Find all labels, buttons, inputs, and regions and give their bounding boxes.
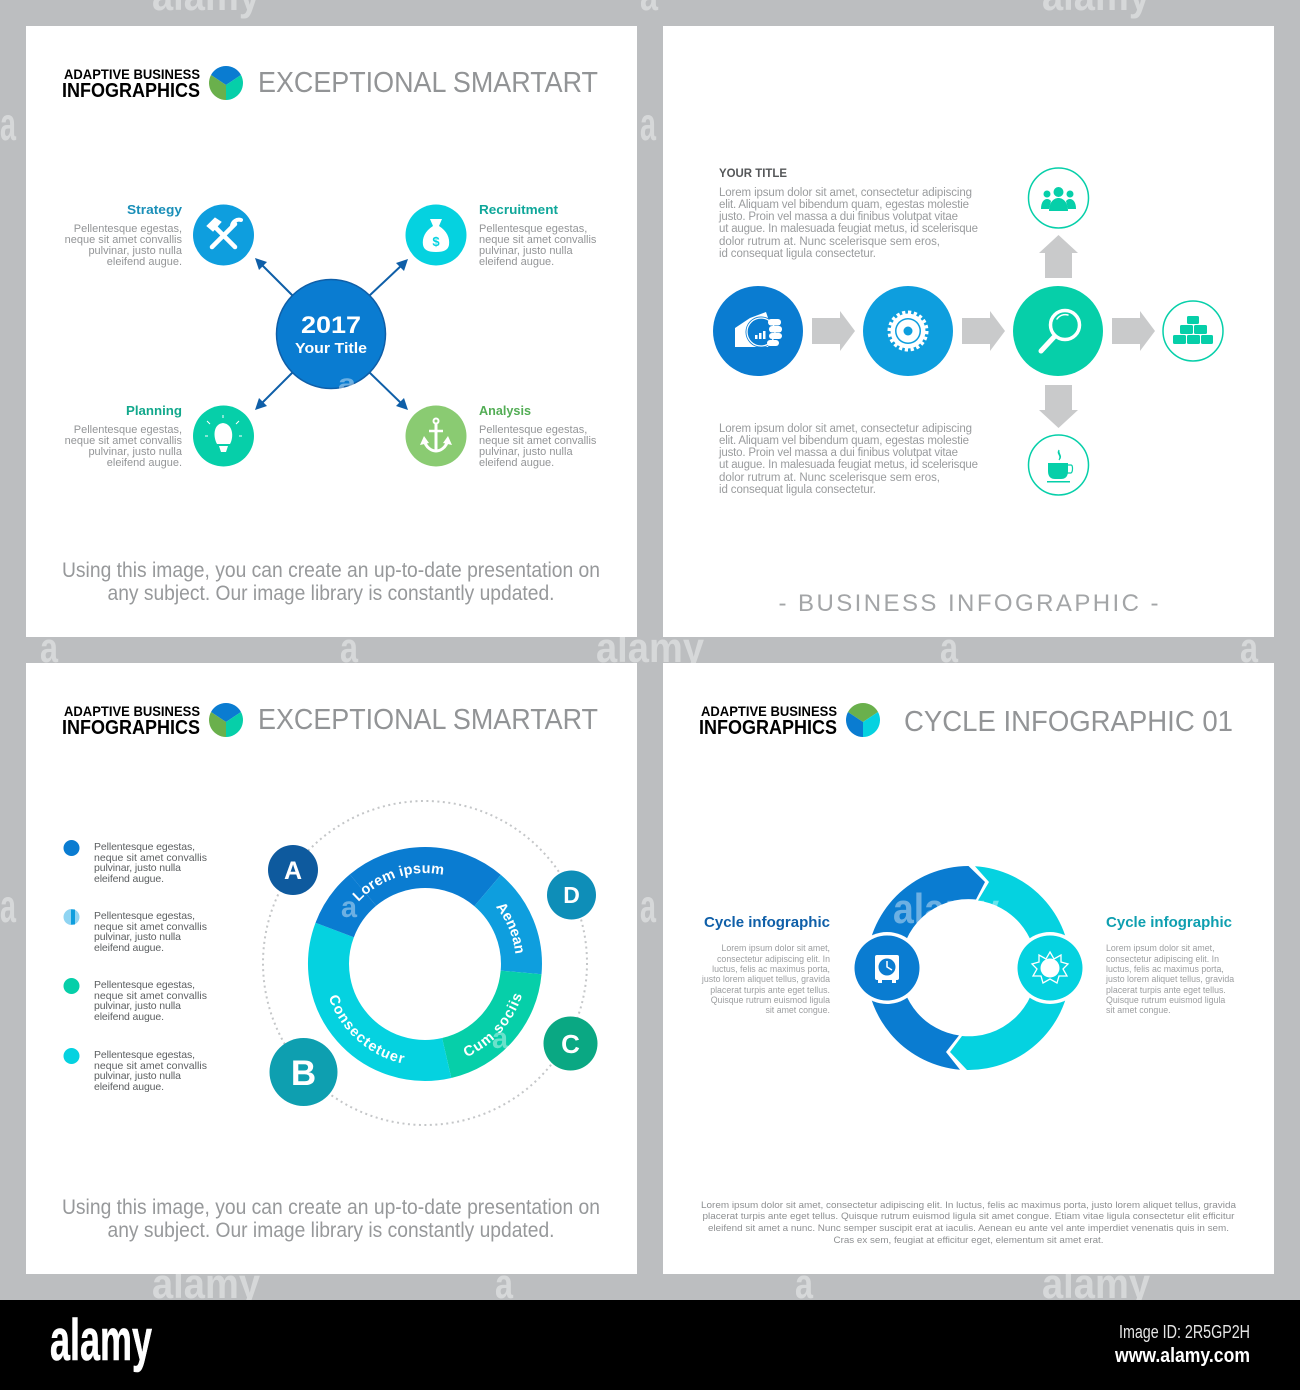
node: recruitment [406, 202, 597, 268]
right text: Lorem ipsum dolor sit amet, [1106, 943, 1215, 953]
legend: eleifend augue. [94, 942, 164, 954]
left text: consectetur adipiscing elit. In [717, 954, 830, 964]
centre circle: Your Title [295, 340, 367, 357]
node: strategy: pulvinar, justo nulla [88, 245, 183, 257]
icon: tools [207, 218, 241, 247]
legend: eleifend augue. [94, 1011, 164, 1023]
node: strategy: Pellentesque egestas, [74, 223, 182, 235]
badge: C [544, 1016, 598, 1070]
icon: magnifier [1041, 310, 1080, 351]
icon: money bag [423, 219, 449, 252]
badge: D [547, 870, 596, 920]
node: planning: pulvinar, justo nulla [88, 446, 183, 458]
icon: anchor [420, 418, 452, 451]
watermark tiles on background: a [1240, 624, 1258, 671]
node: strategy: neque sit amet convallis [65, 234, 182, 246]
panel: donut chart [26, 663, 637, 1274]
left text: luctus, felis ac maximus porta, [712, 964, 830, 974]
node: planning: eleifend augue. [107, 457, 182, 469]
node: planning: Pellentesque egestas, [74, 424, 182, 436]
node: recruitment: pulvinar, justo nulla [479, 245, 573, 257]
right text: Quisque rutrum euismod ligula [1106, 995, 1225, 1005]
icon: gear [890, 312, 926, 350]
watermark tiles on background: alamy [152, 1260, 261, 1307]
header logo and wordmark: INFOGRAPHICS [699, 717, 837, 739]
left text: sit amet congue. [765, 1005, 830, 1015]
watermark tiles on background: a [795, 1260, 813, 1307]
watermarks over panels: alamy [893, 885, 1000, 932]
node: planning: neque sit amet convallis [65, 435, 182, 447]
legend: Pellentesque egestas, [94, 841, 195, 853]
left text [701, 914, 830, 1015]
caption: Using this image, you can create an up-to-date presentation on [62, 1196, 600, 1219]
right text: sit amet congue. [1106, 1005, 1171, 1015]
footer paragraph: Lorem ipsum dolor sit amet, consectetur adipiscing elit. In luctus, felis ac maximus porta, justo lorem aliquet tellus, gravida [701, 1200, 1237, 1211]
node: recruitment: eleifend augue. [479, 256, 554, 268]
ring labels: Aenean [496, 904, 523, 954]
brand: alamy [50, 1308, 152, 1373]
legend: eleifend augue. [94, 873, 164, 885]
badge: C: C [561, 1029, 580, 1059]
text block: lower: dolor rutrum at. Nunc scelerisque sem eros, [719, 472, 940, 484]
icon: bars [1173, 316, 1213, 344]
image id: Image ID: 2R5GP2H [1119, 1322, 1250, 1342]
title: YOUR TITLE [719, 168, 787, 180]
legend: neque sit amet convallis [94, 852, 207, 864]
icon: people [1041, 187, 1076, 211]
left text: justo lorem aliquet tellus, gravida [701, 974, 830, 984]
right text: luctus, felis ac maximus porta, [1106, 964, 1224, 974]
watermarks over panels: a [338, 368, 357, 398]
header logo and wordmark [62, 66, 243, 102]
legend: pulvinar, justo nulla [94, 862, 181, 874]
site url: www.alamy.com [1114, 1345, 1250, 1367]
ring labels: Lorem ipsum [352, 865, 444, 902]
right text: justo lorem aliquet tellus, gravida [1105, 974, 1234, 984]
node: planning: Planning [126, 403, 182, 418]
panel: cycle [663, 663, 1274, 1274]
text block: lower: Lorem ipsum dolor sit amet, consectetur adipiscing [719, 423, 972, 435]
heading: CYCLE INFOGRAPHIC 01 [904, 706, 1233, 738]
ring labels: Cum sociis [464, 994, 522, 1056]
arrows [255, 258, 408, 410]
icon: star [1032, 952, 1068, 983]
legend: eleifend augue. [94, 1081, 164, 1093]
step: magnifier [1013, 286, 1103, 376]
badge: D: D [563, 882, 580, 908]
text block: upper: ut augue. In malesuada feugiat metus, id scelerisque [719, 223, 978, 235]
outcome: coffee [1028, 435, 1088, 495]
header logo and wordmark [62, 703, 243, 739]
watermark tiles on background: a [40, 624, 58, 671]
watermark tiles on background: alamy [1042, 1260, 1151, 1307]
header logo and wordmark: ADAPTIVE BUSINESS [64, 66, 200, 82]
watermark tiles on background: a [340, 624, 358, 671]
node: analysis [406, 403, 597, 469]
heading: EXCEPTIONAL SMARTART [258, 704, 598, 736]
node: planning [65, 403, 254, 469]
watermarks over panels: a [341, 891, 357, 924]
ring labels: Consectetuer [330, 995, 405, 1063]
node: analysis: neque sit amet convallis [479, 435, 597, 447]
icon: hand [735, 312, 782, 348]
panel: process flow [663, 26, 1274, 637]
legend: pulvinar, justo nulla [94, 931, 181, 943]
badge: A: A [284, 857, 302, 885]
dotted orbit [263, 801, 587, 1125]
node: analysis: Pellentesque egestas, [479, 424, 587, 436]
right text: consectetur adipiscing elit. In [1106, 954, 1219, 964]
left text: Cycle infographic [704, 914, 830, 931]
node: recruitment: Pellentesque egestas, [479, 223, 587, 235]
legend: pulvinar, justo nulla [94, 1070, 181, 1082]
footer paragraph: eleifend sit amet a nunc. Nunc semper suscipit erat at iaculis. Aenean eu ante vel ante imperdiet venenatis quis in sem. [708, 1223, 1229, 1234]
donut ring [329, 867, 521, 1060]
watermark tiles on background: a [640, 98, 656, 150]
text block: lower: elit. Aliquam vel bibendum quam, egestas molestie [719, 435, 969, 447]
legend: neque sit amet convallis [94, 921, 207, 933]
step: gear [863, 286, 953, 376]
legend: pulvinar, justo nulla [94, 1000, 181, 1012]
header logo and wordmark: ADAPTIVE BUSINESS [701, 703, 837, 719]
right text: Cycle infographic [1106, 914, 1232, 931]
right text [1105, 914, 1234, 1015]
header logo and wordmark: ADAPTIVE BUSINESS [64, 703, 200, 719]
left node [851, 932, 923, 1004]
arrows [812, 235, 1155, 428]
watermark tiles on background: a [0, 98, 16, 150]
centre circle: 2017 [301, 312, 361, 339]
text block: upper: elit. Aliquam vel bibendum quam, egestas molestie [719, 199, 969, 211]
legend: neque sit amet convallis [94, 1060, 207, 1072]
text block: lower: id consequat ligula consectetur. [719, 484, 876, 496]
icon: money bag: $ [432, 234, 440, 249]
icon: safe [875, 955, 899, 983]
text block: lower: ut augue. In malesuada feugiat metus, id scelerisque [719, 459, 978, 471]
outcome: team [1028, 168, 1088, 228]
legend: Pellentesque egestas, [94, 910, 195, 922]
badge: A [268, 845, 318, 895]
text block: upper: Lorem ipsum dolor sit amet, consectetur adipiscing [719, 187, 972, 199]
watermark tiles on background: a [940, 624, 958, 671]
left text: Lorem ipsum dolor sit amet, [721, 943, 830, 953]
text block: upper: justo. Proin vel massa a dui finibus volutpat vitae [718, 211, 958, 223]
watermark tiles on background: a [640, 880, 656, 932]
watermark tiles on background: alamy [596, 624, 705, 671]
tagline: - BUSINESS INFOGRAPHIC - [778, 590, 1158, 617]
caption: Using this image, you can create an up-to-date presentation on [62, 559, 600, 582]
badge: B [270, 1038, 338, 1106]
footer bar [0, 1300, 1300, 1390]
footer paragraph: placerat turpis ante eget tellus. Quisque rutrum euismod ligula sit amet congue. Etiam vitae ligula consectetur elit efficitur [702, 1211, 1234, 1222]
badge: B: B [291, 1054, 316, 1093]
node: strategy [65, 202, 254, 268]
header logo and wordmark: INFOGRAPHICS [62, 80, 200, 102]
step: hand with chart [713, 286, 803, 376]
right node [1014, 932, 1086, 1004]
legend: Pellentesque egestas, [94, 979, 195, 991]
left text: placerat turpis ante eget tellus. [710, 985, 830, 995]
outcome: gold bars [1163, 301, 1223, 361]
node: analysis: pulvinar, justo nulla [479, 446, 573, 458]
header logo and wordmark [699, 703, 880, 739]
right text: placerat turpis ante eget tellus. [1106, 985, 1226, 995]
cycle ring [866, 866, 1070, 1070]
icon: cup [1047, 450, 1072, 482]
centre circle [276, 280, 386, 388]
node: analysis: eleifend augue. [479, 457, 554, 469]
text block: upper: id consequat ligula consectetur. [719, 248, 876, 260]
heading: EXCEPTIONAL SMARTART [258, 67, 598, 99]
footer paragraph: Cras ex sem, feugiat at efficitur eget, elementum sit amet erat. [834, 1235, 1104, 1246]
legend: Pellentesque egestas, [94, 1049, 195, 1061]
legend [64, 840, 207, 1093]
watermark tiles on background: a [495, 1260, 513, 1307]
node: strategy: eleifend augue. [107, 256, 182, 268]
icon: light bulb [205, 415, 242, 452]
header logo and wordmark: INFOGRAPHICS [62, 717, 200, 739]
legend: neque sit amet convallis [94, 990, 207, 1002]
watermark tiles on background: a [0, 880, 16, 932]
node: recruitment: Recruitment [479, 202, 559, 217]
left text: Quisque rutrum euismod ligula [711, 995, 830, 1005]
panel: mind map [26, 26, 637, 637]
text block: lower: justo. Proin vel massa a dui finibus volutpat vitae [718, 447, 958, 459]
node: analysis: Analysis [479, 403, 531, 418]
caption: any subject. Our image library is constantly updated. [108, 1219, 554, 1242]
ring labels [330, 865, 523, 1063]
caption: any subject. Our image library is constantly updated. [108, 582, 554, 605]
node: recruitment: neque sit amet convallis [479, 234, 597, 246]
watermarks over panels: a [492, 1022, 508, 1055]
watermarks over panels [338, 368, 1000, 1055]
text block: upper: dolor rutrum at. Nunc scelerisque sem eros, [719, 236, 940, 248]
node: strategy: Strategy [127, 202, 183, 217]
